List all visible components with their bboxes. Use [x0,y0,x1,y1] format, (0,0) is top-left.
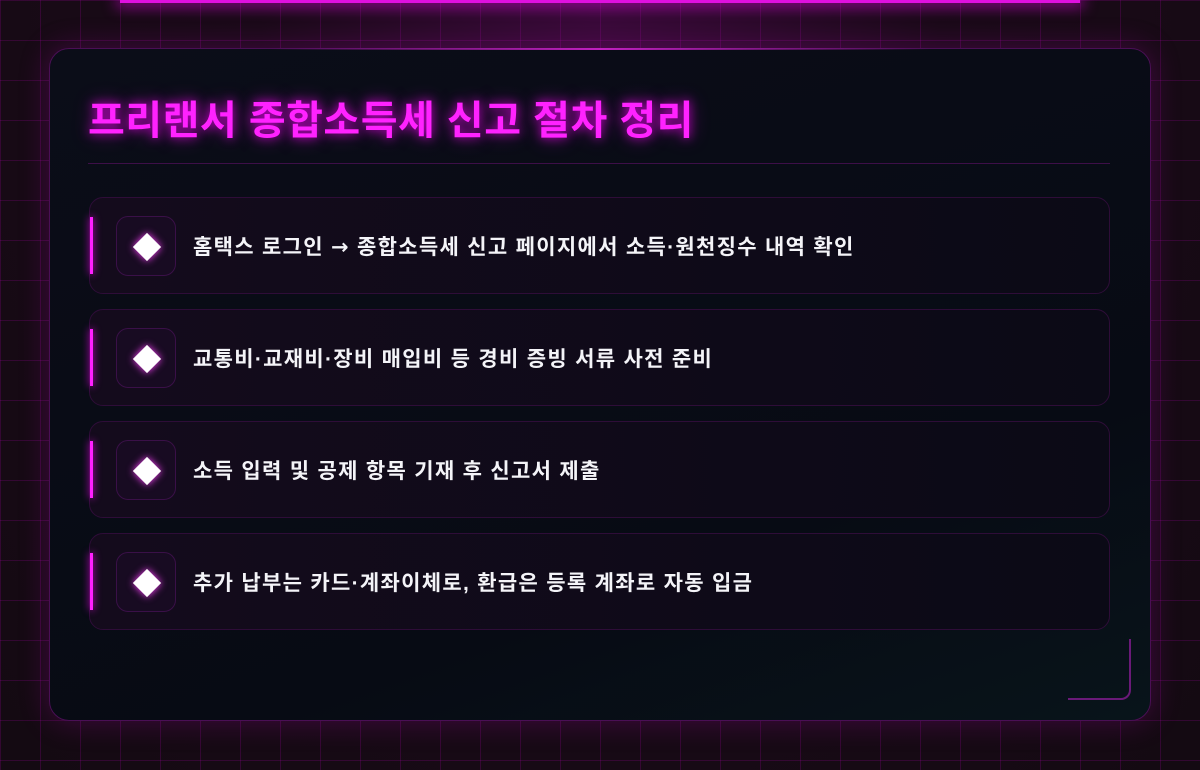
icon: diamond [116,552,176,612]
icon: diamond [116,440,176,500]
icon: diamond [116,328,176,388]
text: step 2: 교통비·교재비·장비 매입비 등 경비 증빙 서류 사전 준비 [193,348,713,371]
corner accent [1068,639,1131,700]
title: 프리랜서 종합소득세 신고 절차 정리 [88,99,694,143]
step 4 [89,533,1110,630]
text: step 4: 추가 납부는 카드·계좌이체로, 환급은 등록 계좌로 자동 입금 [193,572,753,595]
text: step 3: 소득 입력 및 공제 항목 기재 후 신고서 제출 [193,460,601,483]
step 3 [89,421,1110,518]
step 2 [89,309,1110,406]
step 1 [89,197,1110,294]
text: step 1: 홈택스 로그인 → 종합소득세 신고 페이지에서 소득·원천징수 내역 확인 [193,235,855,259]
icon: diamond [116,216,176,276]
